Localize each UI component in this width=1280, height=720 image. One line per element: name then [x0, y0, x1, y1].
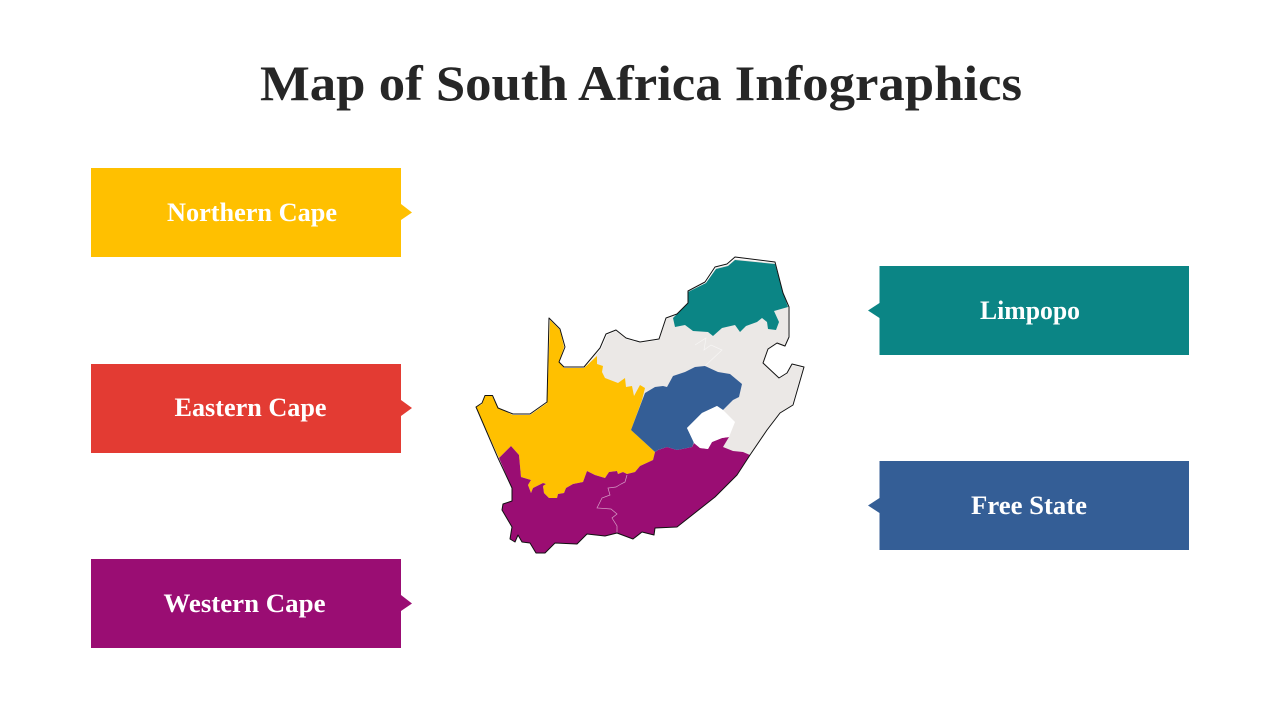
region: remaining provinces	[590, 259, 803, 460]
region: Free State	[631, 366, 742, 452]
province border lines	[597, 338, 722, 533]
callout: Northern Cape	[91, 168, 412, 257]
callout: Free State	[868, 461, 1189, 550]
callout: Western Cape	[91, 559, 412, 648]
callout: Western Cape: Western Cape	[164, 589, 326, 618]
callout: Eastern Cape	[91, 364, 412, 453]
region: Western and Eastern Cape	[499, 437, 750, 553]
callout: Free State: Free State	[971, 491, 1087, 520]
region: Limpopo	[673, 260, 788, 336]
callout: Limpopo: Limpopo	[980, 296, 1080, 325]
country outline	[476, 257, 804, 553]
region: Northern Cape	[476, 320, 655, 498]
region: Lesotho	[687, 406, 735, 449]
callout: Northern Cape: Northern Cape	[167, 198, 337, 227]
map of South Africa	[476, 257, 804, 553]
title: Map of South Africa Infographics	[260, 55, 1022, 111]
callout: Eastern Cape: Eastern Cape	[174, 393, 326, 422]
callout: Limpopo	[868, 266, 1189, 355]
